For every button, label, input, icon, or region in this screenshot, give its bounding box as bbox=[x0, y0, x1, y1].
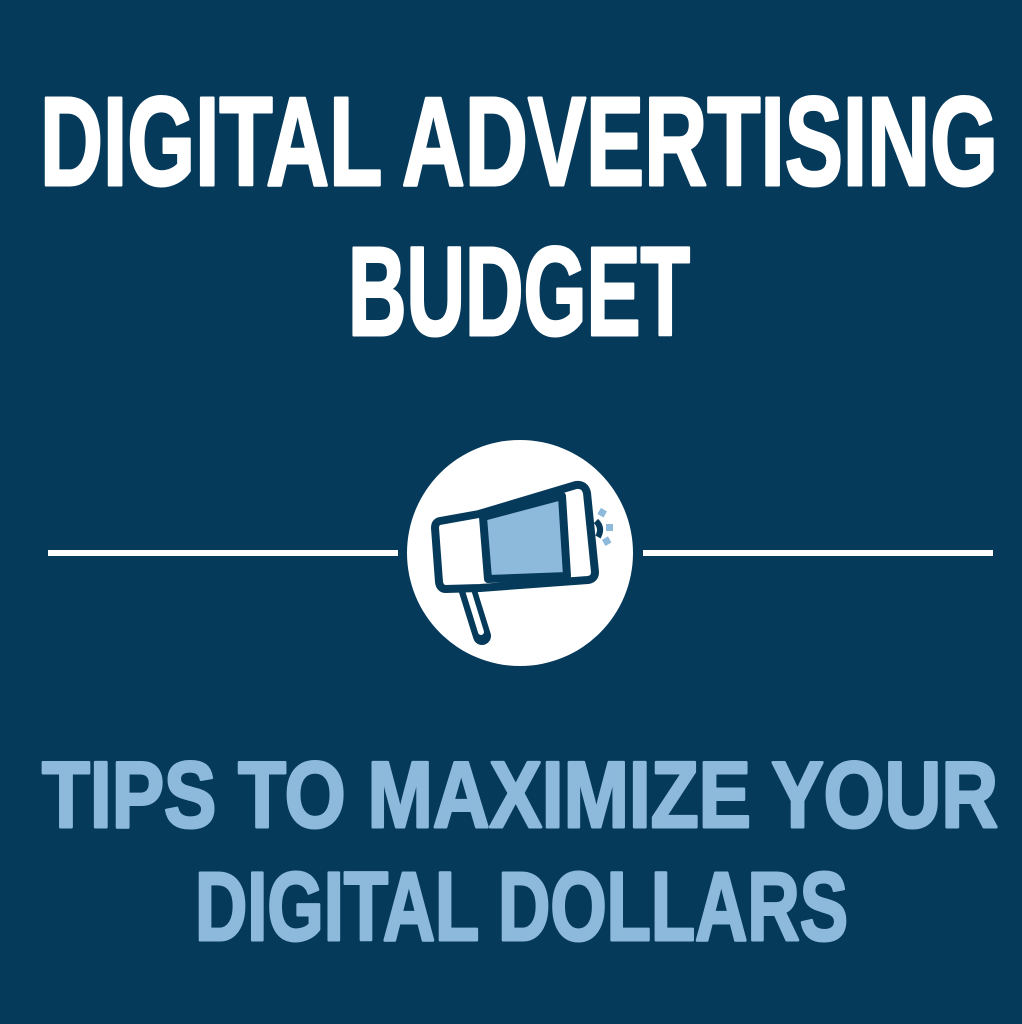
subtitle bbox=[42, 742, 998, 961]
divider line left bbox=[48, 550, 398, 556]
divider line right bbox=[643, 550, 993, 556]
title: BUDGET bbox=[348, 221, 690, 362]
title bbox=[40, 71, 998, 362]
icon: megaphone bbox=[407, 440, 633, 666]
